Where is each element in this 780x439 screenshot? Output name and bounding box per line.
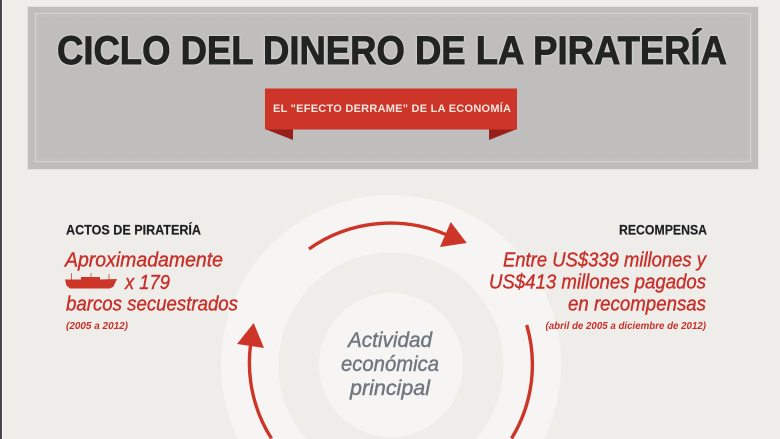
title: CICLO DEL DINERO DE LA PIRATERÍA — [57, 29, 727, 73]
text: ransom amounts: en recompensas — [568, 292, 706, 316]
heading: recompensa: RECOMPENSA — [619, 222, 707, 238]
ribbon subtitle — [265, 88, 517, 140]
text: ransom period: (abril de 2005 a diciembre de 2012) — [546, 321, 707, 332]
heading: actos de piratería: ACTOS DE PIRATERÍA — [66, 222, 201, 238]
text block: center label — [341, 328, 439, 400]
panel: recompensa — [489, 222, 708, 332]
panel: actos de piratería — [63, 222, 238, 332]
text: x 179: x 179 — [124, 271, 170, 294]
text: ransom amounts: Entre US$339 millones y — [503, 248, 708, 272]
icon: ship — [65, 273, 117, 288]
text block: center label: principal — [349, 376, 431, 400]
chart: concentric circles — [221, 195, 561, 439]
panel: title header — [28, 6, 758, 170]
ribbon subtitle: EL "EFECTO DERRAME" DE LA ECONOMÍA — [273, 102, 511, 115]
text block: center label: Actividad — [346, 328, 433, 352]
text: ransom amounts: US$413 millones pagados — [489, 271, 706, 294]
arrow: left cycle arrow — [237, 323, 272, 438]
arrow: right cycle arc — [512, 325, 532, 438]
text: aproximadamente: Aproximadamente — [63, 248, 223, 272]
text block: center label: económica — [341, 352, 439, 376]
text: barcos secuestrados: barcos secuestrados — [66, 292, 238, 316]
text: ransom amounts — [489, 248, 708, 316]
text: period: (2005 a 2012) — [66, 321, 129, 332]
arrow: top cycle arrow — [309, 222, 467, 249]
